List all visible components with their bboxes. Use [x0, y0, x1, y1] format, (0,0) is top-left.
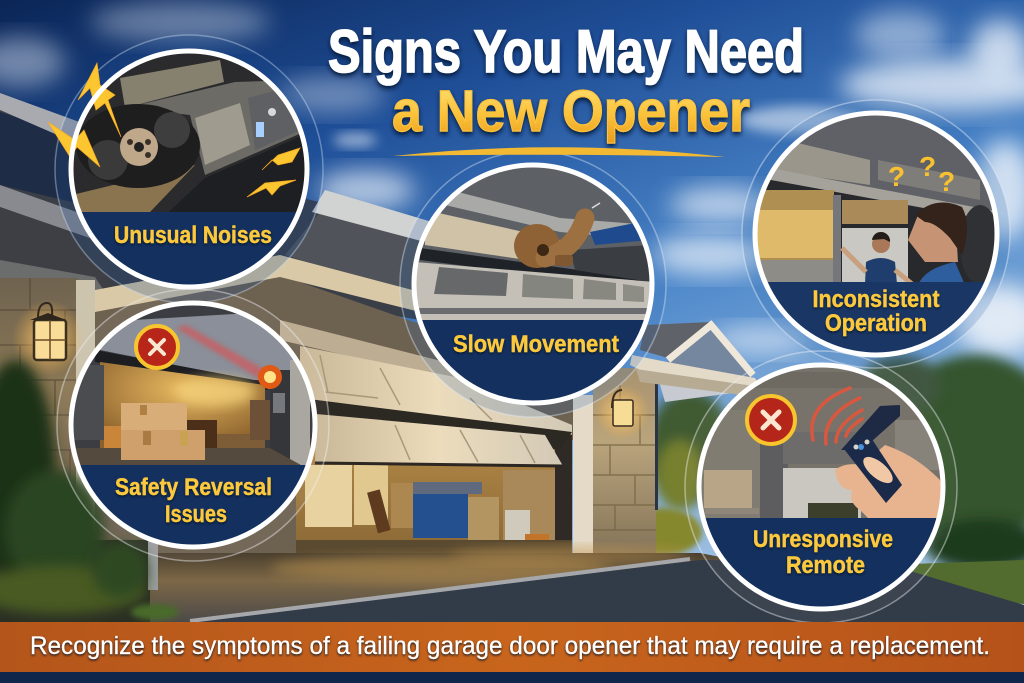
label: Unusual Noises: Unusual Noises [114, 222, 272, 249]
label: Inconsistent Operation: Inconsistent [812, 286, 940, 313]
shelves [391, 483, 413, 528]
circle: Slow Movement [400, 151, 666, 417]
label band [706, 518, 936, 606]
trees right [648, 355, 1024, 571]
warehouse interior [100, 362, 265, 450]
question marks: ? [938, 166, 955, 197]
sensor light [258, 365, 282, 389]
sensor beam [176, 324, 264, 382]
status light [256, 122, 264, 137]
lower eave left [0, 185, 105, 245]
circle: Unresponsive Remote [685, 351, 960, 623]
question marks: ? [888, 161, 905, 192]
lower cream eave [95, 255, 420, 312]
lawn right [880, 560, 1024, 604]
circle: Unusual Noises [48, 35, 323, 303]
child [842, 232, 912, 284]
stone wall left [0, 278, 78, 548]
interior doors [305, 465, 352, 527]
clouds [0, 2, 1024, 356]
house wall below eaves [78, 275, 580, 553]
key fob [841, 405, 902, 503]
bottom banner [0, 622, 1024, 683]
wall and soffit left [0, 207, 110, 300]
error badge [136, 326, 178, 368]
label: Safety Reversal Issues: Safety Reversal [115, 474, 272, 501]
label: Unresponsive Remote [753, 526, 893, 579]
white column left [76, 280, 95, 530]
machine housing [120, 60, 224, 108]
label: Safety Reversal Issues: Issues [165, 501, 227, 528]
circle: Inconsistent Operation [742, 100, 1015, 372]
garage door lower section [315, 414, 563, 466]
tire [966, 205, 994, 221]
error badge [747, 396, 795, 444]
title: Signs You May Need [328, 18, 804, 85]
label band [80, 465, 306, 544]
wall lantern left [12, 300, 84, 376]
bush by stone wall [618, 508, 702, 556]
signal arcs [812, 388, 862, 444]
wall lantern right [594, 384, 650, 440]
roof main [0, 108, 480, 330]
title: a New Opener [392, 79, 750, 144]
hand [835, 445, 950, 518]
label band [422, 320, 644, 400]
bushes left [0, 360, 179, 625]
cabinet [704, 470, 752, 508]
cardboard boxes [121, 403, 205, 460]
snail [514, 203, 600, 268]
garage opening interior [296, 430, 572, 553]
question marks [888, 151, 955, 197]
white pillar [573, 395, 593, 553]
label: Inconsistent Operation [812, 286, 940, 337]
man [908, 202, 967, 285]
label: Unresponsive Remote: Unresponsive [753, 526, 893, 553]
title [328, 18, 804, 144]
garage door upper section [300, 346, 572, 434]
driveway [150, 553, 735, 622]
label: Inconsistent Operation: Operation [825, 310, 927, 337]
label: Safety Reversal Issues [115, 474, 272, 528]
blue cabinet [413, 492, 468, 538]
gutter upper left [0, 93, 115, 160]
question marks: ? [919, 151, 936, 182]
middle door [842, 200, 908, 224]
banner text: Recognize the symptoms of a failing garage door opener that may require a replacement. [30, 632, 990, 660]
stone wall right [593, 368, 656, 553]
lightning bolts [48, 63, 300, 197]
road [190, 560, 1024, 625]
label: Slow Movement: Slow Movement [453, 331, 619, 358]
motor and gear [76, 104, 200, 188]
label band [82, 212, 296, 284]
circle: Safety Reversal Issues [57, 289, 330, 561]
garage floor shadow [296, 540, 572, 553]
label band [768, 282, 984, 352]
right gable [630, 322, 760, 402]
door section with windows [415, 262, 655, 322]
title underline swoosh [393, 147, 725, 157]
left window [756, 190, 834, 262]
gap below upper door [300, 398, 572, 450]
label: Unresponsive Remote: Remote [786, 552, 865, 579]
